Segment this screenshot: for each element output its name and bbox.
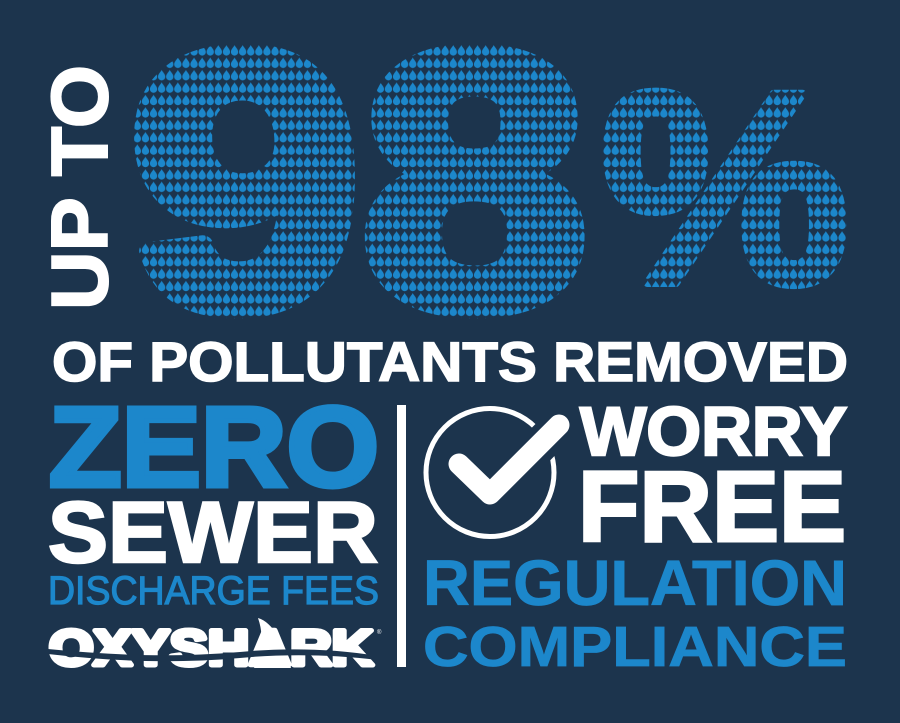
- headline: up to: UP TO: [35, 65, 124, 310]
- subheading: of pollutants removed: OF POLLUTANTS REMOVED: [52, 330, 848, 393]
- logo wave cut: [48, 649, 378, 661]
- logo registered mark: ®: [377, 629, 382, 636]
- percent sign: [603, 88, 847, 290]
- digit 9: [130, 35, 358, 325]
- heading: zero: ZERO: [49, 384, 379, 510]
- heading: sewer: SEWER: [48, 485, 378, 581]
- icon: check mark in circle: [426, 408, 560, 536]
- text: compliance: COMPLIANCE: [423, 615, 847, 679]
- text: regulation: REGULATION: [423, 547, 847, 619]
- divider: [397, 405, 406, 667]
- logo fin: [254, 618, 291, 668]
- big number: 98% filled with water drops: [130, 35, 857, 325]
- heading: free: FREE: [578, 451, 846, 563]
- text: discharge fees: DISCHARGE FEES: [48, 569, 379, 613]
- digit 8: [364, 45, 585, 318]
- heading: worry: WORRY: [580, 393, 847, 470]
- logo: oxyshark: [48, 618, 382, 676]
- logo wordmark: OXYSHARK: [49, 620, 373, 676]
- panel: zero sewer discharge fees: [48, 384, 382, 676]
